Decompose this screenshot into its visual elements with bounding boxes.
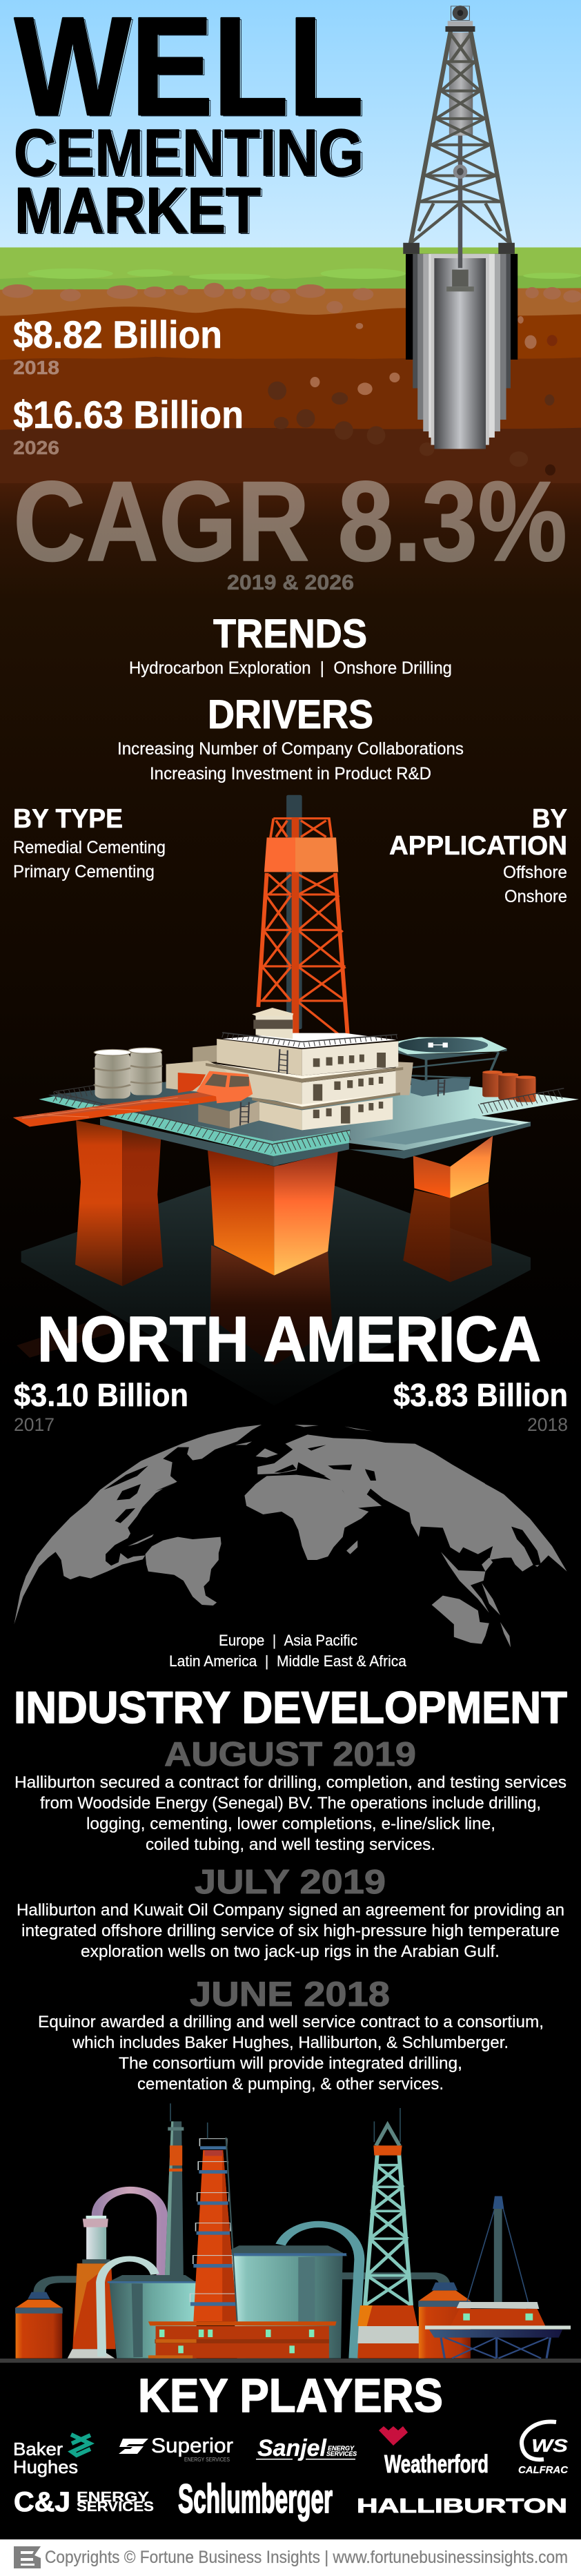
white arch pipe: [101, 2259, 155, 2357]
june 2018 development: which includes Baker Hughes, Halliburton, & Schlumberger.: [72, 2033, 509, 2052]
june 2018 development: cementation & pumping, & other services.: [137, 2075, 444, 2094]
by application: Offshore: [503, 863, 567, 882]
logo: C&J Energy Services: C&J: [14, 2487, 70, 2517]
logo: Sanjel: SERVICES: [326, 2450, 357, 2457]
by application: BY: [532, 804, 567, 834]
north america 2017 value: $3.10 Billion: [14, 1377, 188, 1413]
accommodation building: [166, 1008, 444, 1130]
august 2019 development: from Woodside Energy (Senegal) BV. The operations include drilling,: [40, 1794, 541, 1813]
derrick cone base: [357, 2305, 424, 2359]
drivers: [117, 692, 464, 783]
helipad: [397, 1037, 507, 1096]
logo: Sanjel: Sanjel: [257, 2435, 328, 2461]
logo: Sanjel: [256, 2435, 357, 2461]
rocks in soil: [2, 283, 581, 476]
trends: Hydrocarbon Exploration | Onshore Drilling: [129, 658, 452, 678]
refinery illustration: [15, 2103, 571, 2359]
logo: Weatherford: [379, 2426, 489, 2478]
july 2019 development: exploration wells on two jack-up rigs in the Arabian Gulf.: [81, 1942, 500, 1961]
logo: C&J Energy Services: [14, 2487, 154, 2517]
world globe map: [14, 1425, 567, 1648]
storage tanks: [93, 1048, 162, 1099]
soil and grass ground layers: [0, 247, 581, 483]
august 2019 development: coiled tubing, and well testing services.: [146, 1835, 435, 1854]
june 2018 development: Equinor awarded a drilling and well service contract to a consortium,: [38, 2013, 544, 2031]
market size 2026: 2026: [13, 437, 59, 458]
drivers: Increasing Investment in Product R&D: [150, 764, 431, 783]
market size 2018: $8.82 Billion: [13, 313, 222, 356]
logo: C&J Energy Services: ENERGY: [77, 2490, 150, 2505]
by type: BY TYPE: [13, 804, 123, 834]
august 2019 development: AUGUST 2019: [164, 1736, 416, 1773]
front low building: [148, 2321, 337, 2359]
july 2019 development: JULY 2019: [195, 1864, 386, 1901]
footer logo: [14, 2546, 41, 2568]
logo: Baker Hughes: [13, 2434, 90, 2477]
platform legs: [75, 1120, 493, 1286]
tall stack: [165, 2103, 184, 2276]
drilling tower on platform: [258, 795, 348, 1035]
by application: Onshore: [504, 887, 567, 906]
pump mast platform: [425, 2196, 571, 2359]
trends: [129, 612, 452, 678]
lattice derrick: [365, 2108, 411, 2305]
platform deck: [39, 1082, 579, 1166]
logo: Calfrac: WS: [531, 2435, 569, 2456]
by type: Primary Cementing: [13, 862, 155, 881]
platform railings: [54, 1033, 564, 1149]
oil barrels: [482, 1071, 536, 1102]
august 2019 development: [14, 1736, 567, 1854]
june 2018 development: JUNE 2018: [190, 1975, 390, 2013]
orange furnace column: [68, 2216, 116, 2359]
other regions list: Latin America | Middle East & Africa: [169, 1652, 407, 1670]
teal arch pipe: [281, 2224, 360, 2359]
well casing pipes: [406, 254, 518, 449]
july 2019 development: [17, 1864, 564, 1961]
north america 2018 value: [393, 1377, 568, 1435]
north america 2017 value: [14, 1377, 188, 1435]
july 2019 development: Halliburton and Kuwait Oil Company signed an agreement for providing an: [17, 1901, 564, 1920]
key players heading: KEY PLAYERS: [138, 2369, 443, 2422]
north america heading: NORTH AMERICA: [37, 1303, 541, 1375]
logo: Schlumberger: Schlumberger: [178, 2477, 333, 2521]
right vessel: [418, 2283, 471, 2359]
logo: Calfrac: [518, 2421, 569, 2476]
background: sky: [0, 0, 581, 248]
refinery connecting pipes: [39, 2276, 444, 2293]
logo: Sanjel: ENERGY: [328, 2445, 355, 2452]
north america 2018 value: 2018: [527, 1414, 568, 1435]
by application: APPLICATION: [389, 831, 567, 861]
logo: Superior: [119, 2434, 233, 2463]
july 2019 development: integrated offshore drilling service of six high-pressure high temperature: [21, 1922, 560, 1940]
helipad: H: [426, 1041, 450, 1049]
oil derrick: [403, 6, 515, 291]
drivers: Increasing Number of Company Collaborations: [117, 739, 464, 759]
north america 2017 value: 2017: [14, 1414, 55, 1435]
by type: Remedial Cementing: [13, 838, 166, 857]
trends: TRENDS: [213, 612, 367, 656]
other regions list: Europe | Asia Pacific: [219, 1632, 357, 1649]
market size 2026: $16.63 Billion: [13, 393, 244, 436]
logo: C&J Energy Services: SERVICES: [77, 2499, 154, 2515]
drivers: DRIVERS: [208, 692, 373, 737]
footer bar: [0, 2539, 581, 2576]
market size 2018: [13, 313, 222, 378]
ground line: [0, 2359, 581, 2363]
title: CEMENTING: [14, 116, 364, 190]
orange crane: [13, 1071, 253, 1126]
logo: Superior: ENERGY SERVICES: [184, 2457, 230, 2463]
north america 2018 value: $3.83 Billion: [393, 1377, 568, 1413]
title: [14, 0, 366, 247]
left storage tank: [108, 2275, 197, 2359]
logo: Baker Hughes: Baker: [13, 2439, 63, 2459]
august 2019 development: Halliburton secured a contract for drilling, completion, and testing services: [14, 1773, 567, 1792]
logo: Baker Hughes: Hughes: [13, 2457, 78, 2477]
purple arch pipe: [97, 2190, 162, 2276]
june 2018 development: The consortium will provide integrated drilling,: [119, 2054, 462, 2073]
other regions list: [169, 1632, 407, 1670]
right storage tank: [228, 2245, 348, 2359]
title: MARKET: [14, 174, 261, 246]
CAGR figure: 2019 & 2026: [227, 570, 354, 594]
logo: Superior: Superior: [151, 2434, 233, 2457]
offshore platform sea base and reflection: [17, 1164, 531, 1405]
background: underground fading to black: [0, 442, 581, 1380]
title: CEMENTING: [16, 117, 366, 191]
market size 2018: 2018: [13, 357, 59, 378]
logo: Halliburton: HALLIBURTON: [357, 2495, 567, 2517]
title: MARKET: [17, 175, 262, 247]
august 2019 development: logging, cementing, lower completions, e-line/slick line,: [86, 1815, 495, 1833]
logo: Calfrac: CALFRAC: [518, 2464, 569, 2476]
derrick collar: [373, 2145, 402, 2156]
market size 2026: [13, 393, 244, 458]
left vessel: [15, 2292, 63, 2359]
by application: [389, 804, 567, 906]
industry development heading: INDUSTRY DEVELOPMENT: [14, 1682, 567, 1733]
logo: Weatherford: Weatherford: [384, 2450, 489, 2478]
central orange tower with platforms: [190, 2123, 237, 2321]
june 2018 development: [38, 1975, 544, 2094]
by type: [13, 804, 166, 881]
